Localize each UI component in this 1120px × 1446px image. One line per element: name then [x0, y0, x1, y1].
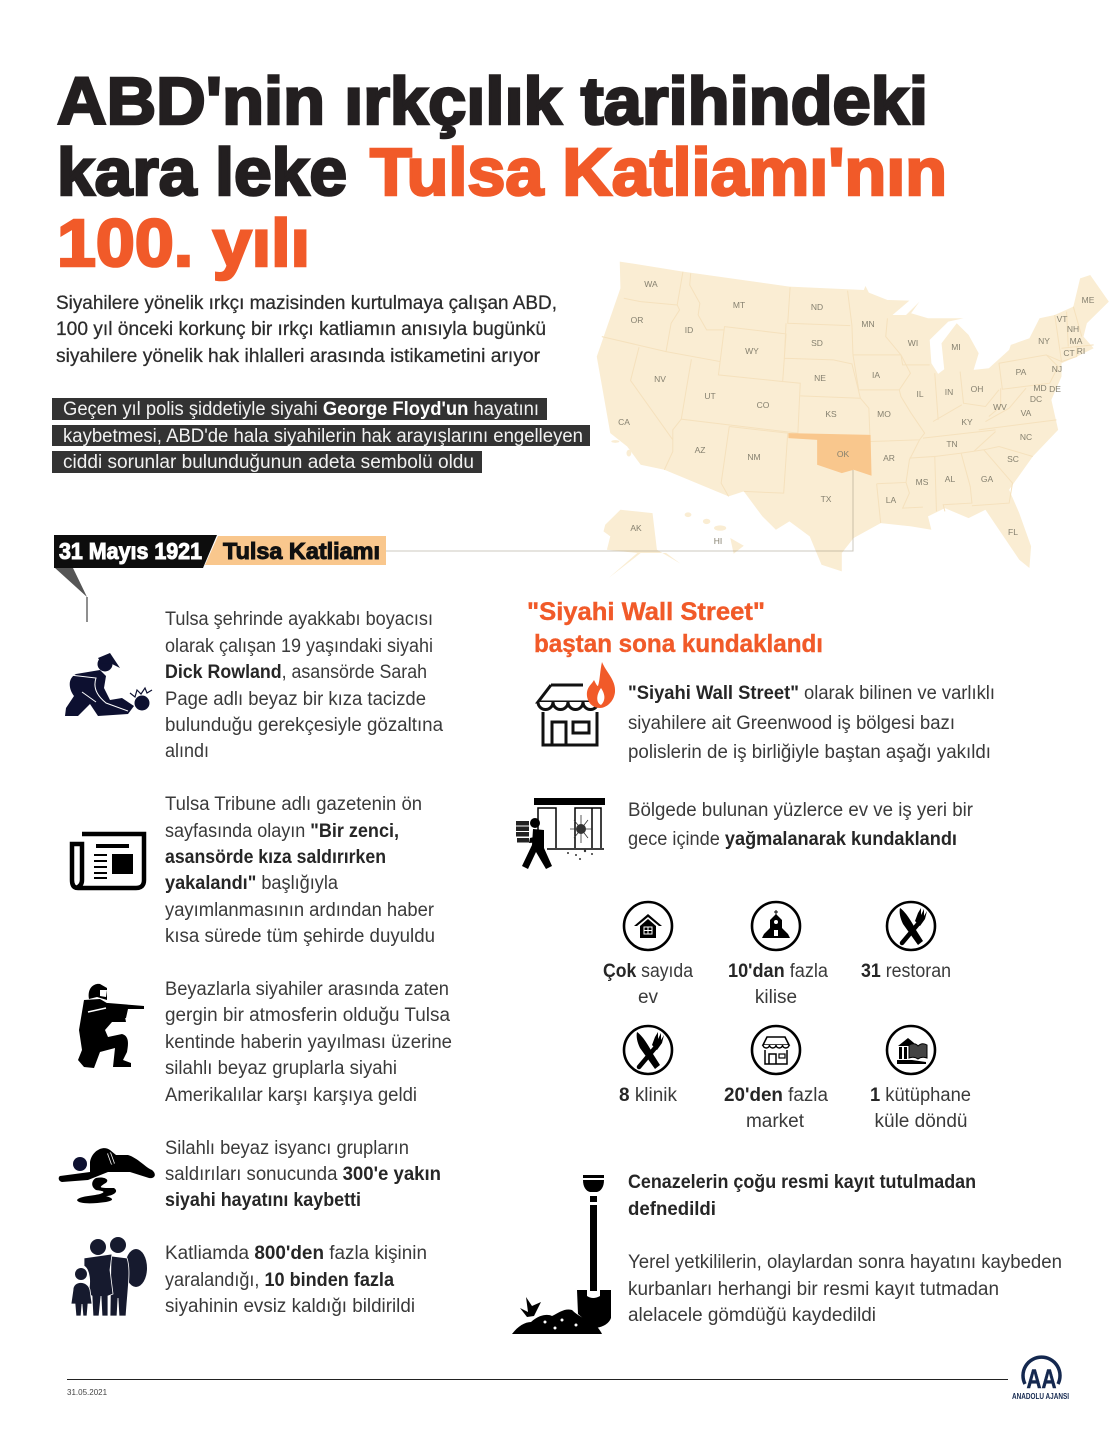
- text: newspaper headline: yayımlanmasının ardından haber: [165, 900, 435, 921]
- state labels: AZ: [695, 445, 705, 455]
- state labels: IA: [872, 370, 880, 380]
- stat: markets: market: [746, 1111, 805, 1132]
- text: injured and homeless: [165, 1243, 427, 1317]
- state labels: HI: [714, 536, 722, 546]
- stat: library: [870, 1026, 971, 1132]
- text: newspaper headline: yakalandı" başlığıyla: [165, 873, 338, 894]
- stat: churches: [728, 902, 828, 1008]
- state labels: WA: [644, 279, 658, 289]
- text: casualties: siyahi hayatını kaybetti: [165, 1190, 361, 1211]
- state labels: MS: [916, 477, 929, 487]
- state labels: NM: [747, 452, 761, 462]
- Oklahoma highlight: [788, 433, 872, 476]
- state labels: FL: [1008, 527, 1018, 537]
- connector line from heading to Oklahoma: [386, 470, 853, 551]
- logo: Anadolu Ajansı: AA: [1026, 1364, 1056, 1394]
- text: Greenwood: siyahilere ait Greenwood iş bölgesi bazı: [628, 713, 955, 734]
- state labels: ID: [685, 325, 693, 335]
- text: Dick Rowland: Tulsa şehrinde ayakkabı boyacısı: [165, 609, 433, 630]
- stat: clinics: 8 klinik: [619, 1085, 677, 1106]
- text: armed confrontation: Amerikalılar karşı karşıya geldi: [165, 1085, 417, 1106]
- footer rule: [67, 1378, 1008, 1380]
- intro text: siyahilere yönelik hak ihlalleri arasında istikametini arıyor: [56, 346, 541, 367]
- text: casualties: Silahlı beyaz isyancı grupların: [165, 1138, 409, 1159]
- text: injured and homeless: Katliamda 800'den fazla kişinin: [165, 1243, 427, 1264]
- state labels: TX: [821, 494, 832, 504]
- state labels: UT: [704, 391, 716, 401]
- state labels: SD: [811, 338, 823, 348]
- stat: houses: Çok sayıda: [603, 961, 693, 982]
- title: ABD'nin ırkçılık tarihindeki: [57, 64, 928, 139]
- stat: markets: 20'den fazla: [724, 1085, 828, 1106]
- icon: shovel and dirt mound: [512, 1175, 611, 1334]
- state labels: KY: [961, 417, 973, 427]
- text: Dick Rowland: bulunduğu gerekçesiyle gözaltına: [165, 715, 443, 736]
- date: 31.05.2021: [67, 1388, 108, 1397]
- title: 100. yılı: [57, 206, 310, 281]
- state labels: NH: [1067, 324, 1079, 334]
- heading: Siyahi Wall Street: "Siyahi Wall Street": [527, 598, 765, 626]
- text: Dick Rowland: Page adlı beyaz bir kıza tacizde: [165, 689, 426, 710]
- icon: store on fire: [538, 662, 615, 745]
- stat: houses: [603, 902, 693, 1008]
- state labels: WV: [993, 402, 1007, 412]
- highlighted callout: Geçen yıl polis şiddetiyle siyahi George Floyd'un hayatını: [63, 399, 539, 420]
- state labels: AK: [630, 523, 642, 533]
- intro text: 100 yıl önceki korkunç bir ırkçı katliamın anısıyla bugünkü: [56, 319, 546, 340]
- stat: churches: kilise: [755, 987, 797, 1008]
- text: newspaper headline: Tulsa Tribune adlı gazetenin ön: [165, 794, 422, 815]
- text: looting: Bölgede bulunan yüzlerce ev ve iş yeri bir: [628, 800, 974, 821]
- intro text: [56, 293, 557, 367]
- text: armed confrontation: kentinde haberin yayılması üzerine: [165, 1032, 452, 1053]
- heading: Siyahi Wall Street: [527, 598, 823, 658]
- intro text: Siyahilere yönelik ırkçı mazisinden kurtulmaya çalışan ABD,: [56, 293, 557, 314]
- stat: library: küle döndü: [875, 1111, 967, 1132]
- stat: markets: [724, 1026, 828, 1132]
- text: newspaper headline: [165, 794, 435, 947]
- title: Tulsa Katliamı'nın: [370, 135, 947, 210]
- state labels: LA: [886, 495, 897, 505]
- map: United States with Oklahoma highlighted: [597, 262, 1109, 578]
- state labels: MT: [733, 300, 745, 310]
- text: Greenwood: polislerin de iş birliğiyle baştan aşağı yakıldı: [628, 742, 991, 763]
- stat: library: 1 kütüphane: [870, 1085, 971, 1106]
- state labels: ND: [811, 302, 823, 312]
- section heading: 31 Mayıs 1921 Tulsa Katliamı: Tulsa Katliamı: [223, 538, 380, 564]
- stat: restaurants: [861, 902, 951, 982]
- text: Dick Rowland: Dick Rowland, asansörde Sarah: [165, 662, 427, 683]
- text: armed confrontation: gergin bir atmosferin olduğu Tulsa: [165, 1005, 450, 1026]
- state labels: AL: [945, 474, 955, 484]
- text: burials: kurbanları herhangi bir resmi kayıt tutmadan: [628, 1279, 999, 1300]
- state labels: MA: [1070, 336, 1083, 346]
- text: casualties: [165, 1138, 441, 1211]
- state labels: VA: [1021, 408, 1032, 418]
- stat: restaurants: 31 restoran: [861, 961, 951, 982]
- state labels: DE: [1049, 384, 1061, 394]
- state labels: IL: [916, 389, 924, 399]
- state labels: [618, 279, 1095, 546]
- highlighted callout: [52, 398, 590, 473]
- state labels: SC: [1007, 454, 1019, 464]
- text: newspaper headline: kısa sürede tüm şehirde duyuldu: [165, 926, 435, 947]
- state labels: KS: [825, 409, 837, 419]
- text: looting: gece içinde yağmalanarak kundaklandı: [628, 829, 957, 850]
- state labels: OK: [837, 449, 849, 459]
- state labels: MI: [951, 342, 961, 352]
- logo: Anadolu Ajansı: [1012, 1357, 1069, 1401]
- state labels: CO: [757, 400, 770, 410]
- icon: kneeling soldier: [78, 984, 144, 1068]
- state labels: PA: [1016, 367, 1027, 377]
- text: Greenwood: "Siyahi Wall Street" olarak bilinen ve varlıklı: [628, 683, 995, 704]
- text: newspaper headline: asansörde kıza saldırırken: [165, 847, 386, 868]
- text: armed confrontation: [165, 979, 452, 1106]
- state labels: RI: [1077, 346, 1085, 356]
- state labels: NY: [1038, 336, 1050, 346]
- text: Dick Rowland: olarak çalışan 19 yaşındaki siyahi: [165, 636, 433, 657]
- state labels: NV: [654, 374, 666, 384]
- state labels: WI: [908, 338, 918, 348]
- icon: police officer pinning a man: [65, 653, 152, 716]
- state labels: IN: [945, 387, 953, 397]
- logo: Anadolu Ajansı: ANADOLU AJANSI: [1012, 1392, 1069, 1401]
- highlighted callout: ciddi sorunlar bulunduğunun adeta sembolü oldu: [63, 452, 474, 473]
- section heading: 31 Mayıs 1921 Tulsa Katliamı: 31 Mayıs 1921: [59, 538, 202, 564]
- title: [57, 64, 947, 281]
- state labels: DC: [1030, 394, 1042, 404]
- icon: fallen body: [59, 1148, 155, 1203]
- text: Greenwood: [628, 683, 995, 763]
- text: armed confrontation: Beyazlarla siyahiler arasında zaten: [165, 979, 449, 1000]
- state labels: MN: [861, 319, 875, 329]
- stat: houses: ev: [638, 987, 659, 1008]
- state labels: TN: [946, 439, 958, 449]
- text: Dick Rowland: [165, 609, 443, 762]
- state labels: MO: [877, 409, 891, 419]
- text: injured and homeless: yaralandığı, 10 binden fazla: [165, 1270, 394, 1291]
- icon: looter and broken window: [516, 798, 605, 869]
- state labels: VT: [1057, 314, 1067, 324]
- text: newspaper headline: sayfasında olayın "Bir zenci,: [165, 821, 399, 842]
- state labels: ME: [1082, 295, 1095, 305]
- text: armed confrontation: silahlı beyaz gruplarla siyahi: [165, 1058, 397, 1079]
- icon: displaced family: [71, 1237, 147, 1316]
- text: burials: alelacele gömdüğü kaydedildi: [628, 1305, 876, 1326]
- stat: churches: 10'dan fazla: [728, 961, 828, 982]
- state labels: GA: [981, 474, 993, 484]
- state labels: NE: [814, 373, 826, 383]
- state labels: MD: [1033, 383, 1047, 393]
- text: injured and homeless: siyahinin evsiz kaldığı bildirildi: [165, 1296, 415, 1317]
- section heading: 31 Mayıs 1921 Tulsa Katliamı: [54, 535, 386, 622]
- state labels: WY: [745, 346, 759, 356]
- text: burials: [628, 1172, 1062, 1326]
- state labels: NJ: [1052, 364, 1062, 374]
- state labels: CT: [1063, 348, 1075, 358]
- text: Dick Rowland: alındı: [165, 741, 209, 762]
- stat: clinics: [619, 1026, 677, 1106]
- icon: newspaper: [72, 834, 144, 888]
- state labels: NC: [1020, 432, 1032, 442]
- text: burials: defnedildi: [628, 1199, 716, 1220]
- state labels: AR: [883, 453, 895, 463]
- state labels: CA: [618, 417, 630, 427]
- text: burials: Cenazelerin çoğu resmi kayıt tutulmadan: [628, 1172, 976, 1193]
- text: looting: [628, 800, 974, 850]
- text: casualties: saldırıları sonucunda 300'e yakın: [165, 1164, 441, 1185]
- state labels: OR: [631, 315, 643, 325]
- text: burials: Yerel yetkililerin, olaylardan sonra hayatını kaybeden: [628, 1252, 1062, 1273]
- heading: Siyahi Wall Street: baştan sona kundaklandı: [534, 630, 823, 658]
- highlighted callout: kaybetmesi, ABD'de hala siyahilerin hak arayışlarını engelleyen: [63, 426, 583, 447]
- state labels: OH: [971, 384, 983, 394]
- title: kara leke: [57, 135, 347, 210]
